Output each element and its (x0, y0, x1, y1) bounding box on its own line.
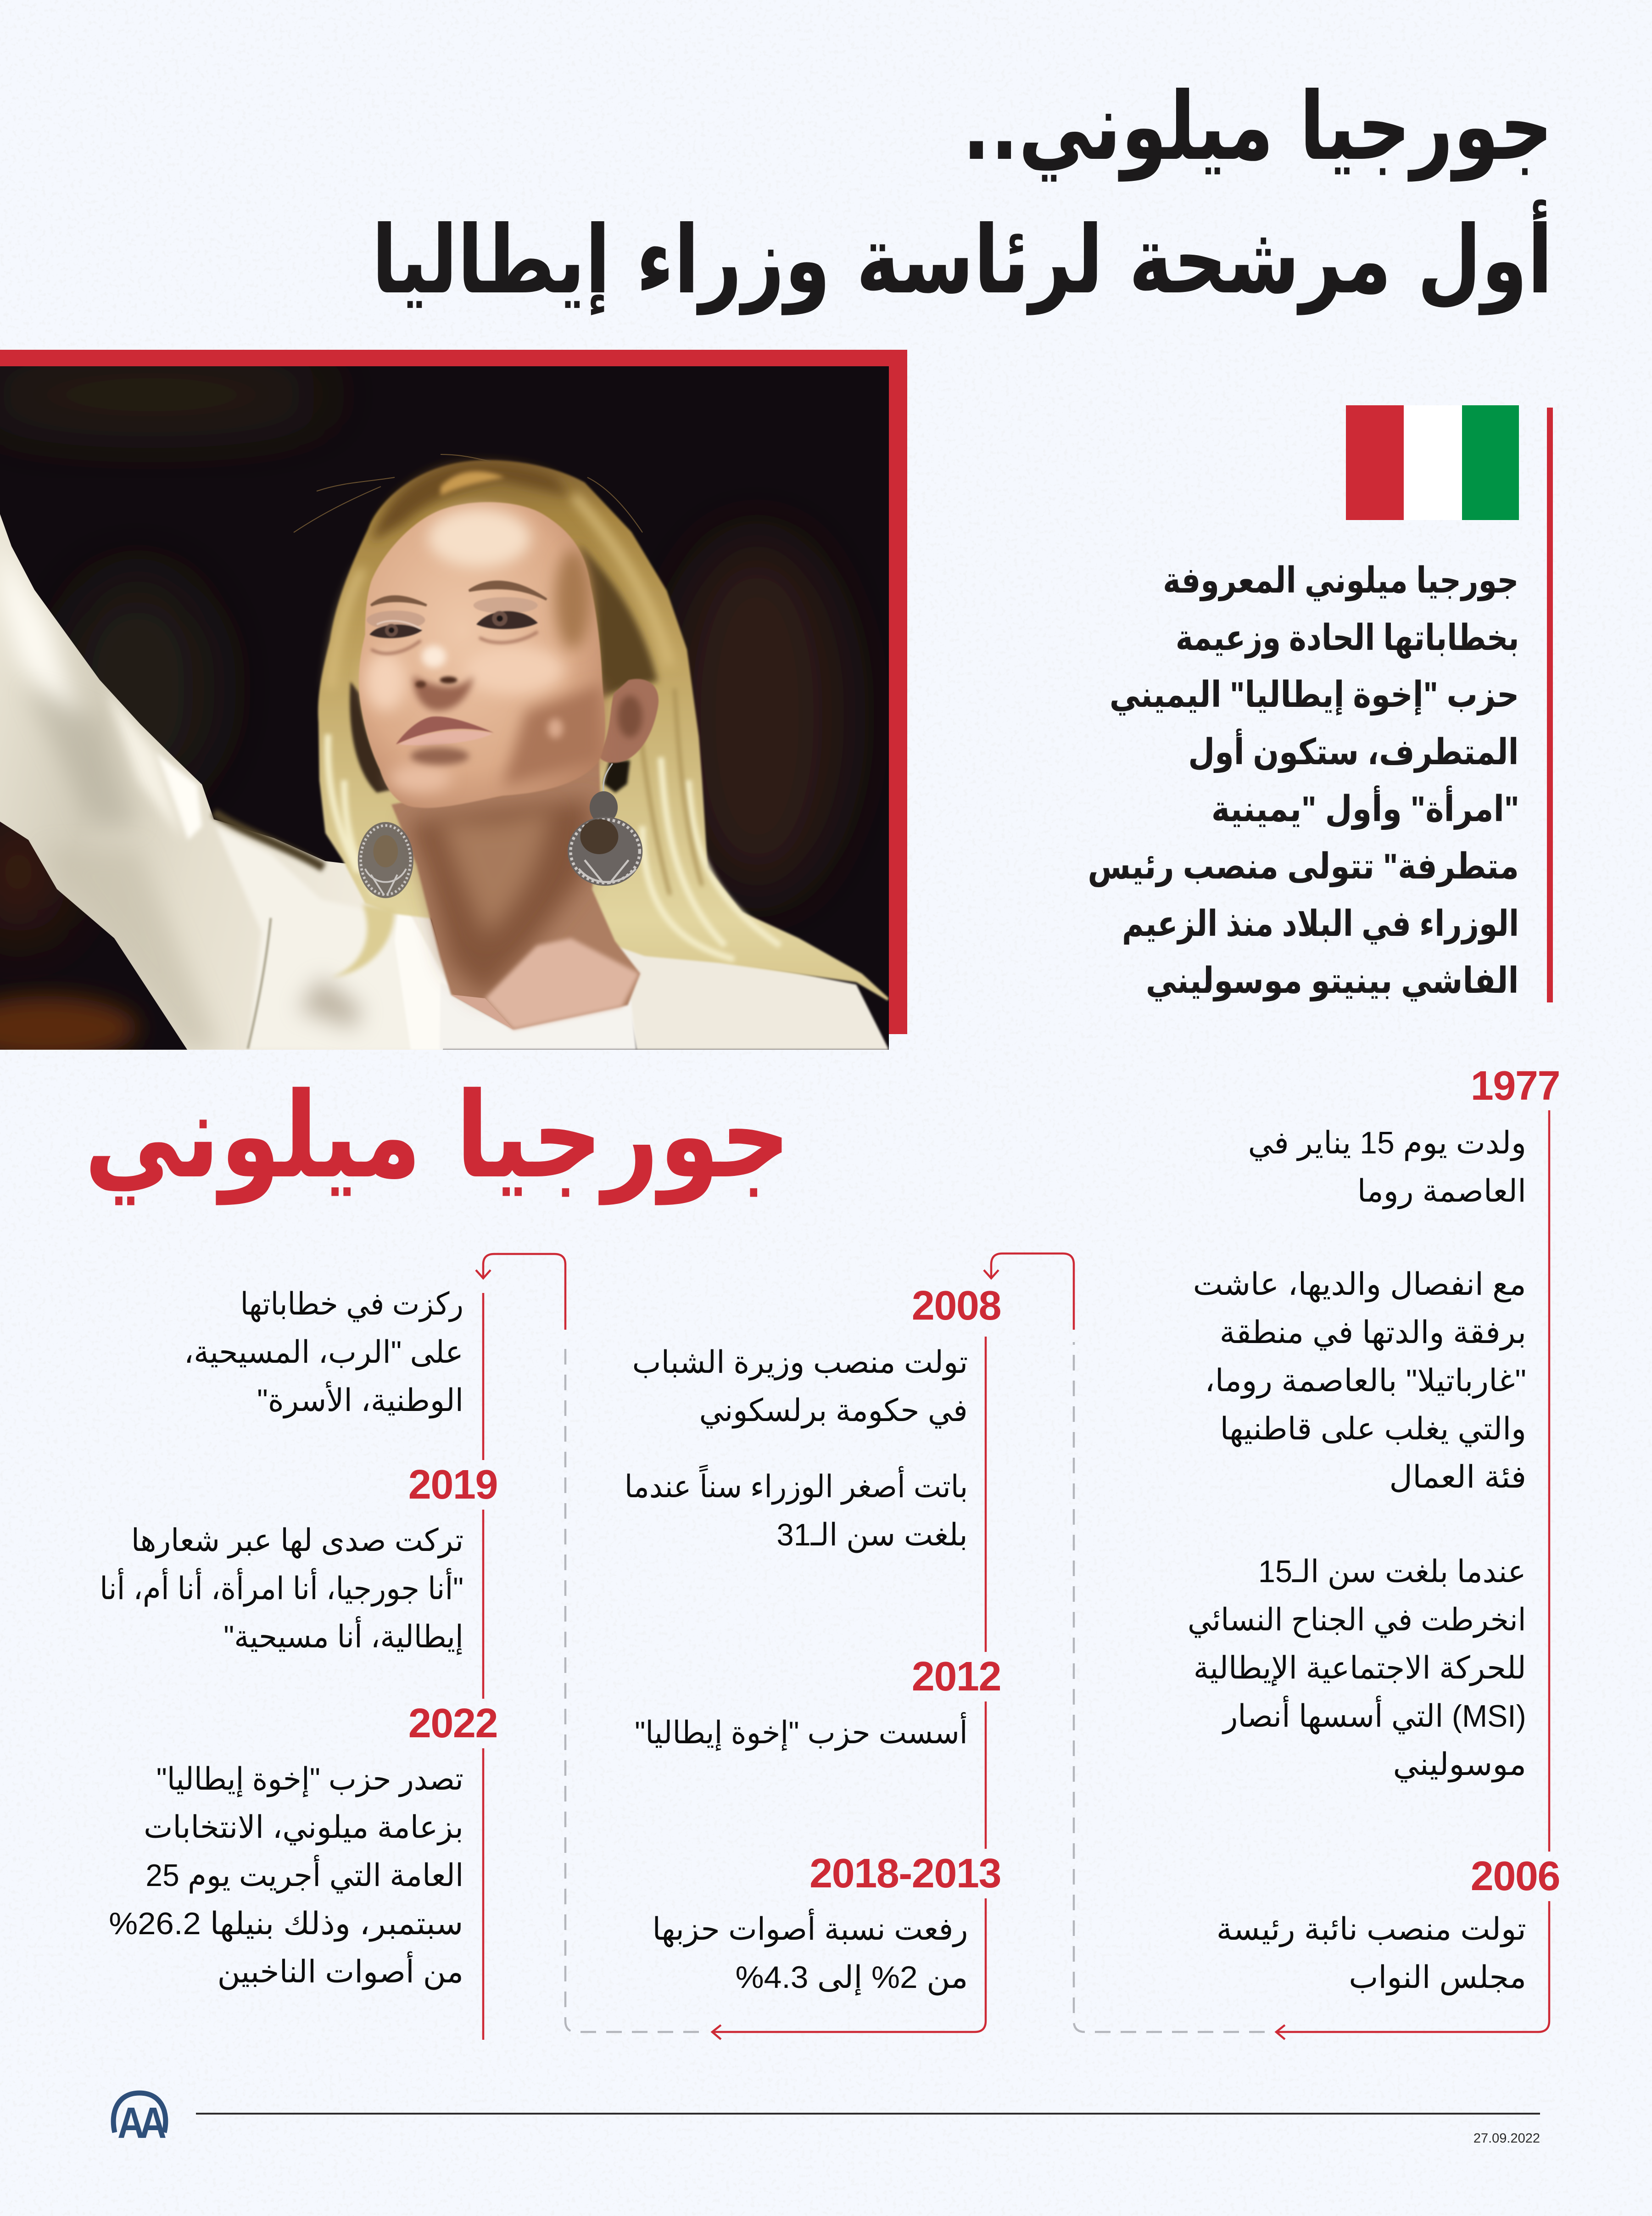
white shirt (440, 982, 636, 1050)
text: vote share: من 2% إلى 4.3% (735, 1960, 968, 1995)
intro text: حزب "إخوة إيطاليا" اليميني (1109, 674, 1519, 715)
intro text: متطرفة" تتولى منصب رئيس (1088, 846, 1519, 886)
footer rule (196, 2113, 1540, 2115)
eyes and brows (367, 582, 547, 638)
text: parents separation: برفقة والدتها في منطقة (1220, 1315, 1526, 1350)
text: youngest minister: بلغت سن الـ31 (777, 1517, 968, 1552)
text: joined MSI: انخرطت في الجناح النسائي (1188, 1602, 1526, 1637)
text: vote share (645, 1905, 968, 2002)
left earring (358, 822, 413, 898)
year 2022: 2022 (408, 1701, 497, 1746)
text: speeches (175, 1280, 463, 1425)
left hair wisp over jacket (330, 904, 395, 978)
text: joined MSI: (MSI) التي أسسها أنصار (1223, 1699, 1526, 1734)
text: parents separation (1197, 1260, 1526, 1501)
text: 2022 election: تصدر حزب "إخوة إيطاليا" (156, 1762, 463, 1796)
text: slogan (78, 1517, 463, 1661)
text: parents separation: فئة العمال (1389, 1460, 1526, 1494)
text: birth: العاصمة روما (1357, 1174, 1526, 1209)
text: speeches: ركزت في خطاباتها (240, 1287, 463, 1321)
year 2019: 2019 (408, 1462, 497, 1508)
connector: column two (712, 1337, 986, 2039)
text: youth minister: تولت منصب وزيرة الشباب (632, 1345, 968, 1380)
text: speeches: على "الرب، المسيحية، (184, 1335, 463, 1370)
year 2008: 2008 (912, 1283, 1001, 1329)
intro text: الفاشي بينيتو موسوليني (1146, 960, 1519, 1001)
text: slogan: تركت صدى لها عبر شعارها (131, 1523, 463, 1558)
arrow into column three (476, 1254, 565, 1330)
text: parents separation: "غارباتيلا" بالعاصمة روما، (1205, 1363, 1526, 1398)
text: youngest minister (605, 1463, 968, 1559)
mouth (396, 716, 494, 765)
text: 2022 election (123, 1755, 463, 1996)
intro text: الوزراء في البلاد منذ الزعيم (1122, 903, 1519, 944)
photo frame (0, 350, 907, 1034)
text: deputy speaker: مجلس النواب (1349, 1960, 1526, 1995)
white jacket and raised arm (0, 505, 459, 1051)
text: 2022 election: من أصوات الناخبين (218, 1954, 463, 1989)
year range 2018-2013: 2018-2013 (809, 1851, 1001, 1897)
intro text (1024, 552, 1519, 1009)
Italian flag (1346, 405, 1519, 520)
text: deputy speaker (1221, 1905, 1526, 2002)
intro side rule (1547, 408, 1553, 1002)
text: birth (1248, 1119, 1526, 1215)
hair (214, 454, 889, 1001)
connector: column one (1276, 1110, 1549, 2039)
year 2012: 2012 (912, 1654, 1001, 1700)
big name heading: جورجيا ميلوني (84, 1067, 791, 1204)
text: birth: ولدت يوم 15 يناير في (1248, 1125, 1526, 1160)
title: جورجيا ميلوني.. (962, 73, 1553, 181)
text: slogan: إيطالية، أنا مسيحية" (224, 1619, 463, 1654)
year 1977: 1977 (1471, 1063, 1560, 1109)
year 2006: 2006 (1471, 1853, 1560, 1899)
text: deputy speaker: تولت منصب نائبة رئيسة (1217, 1912, 1526, 1947)
arrow into column two (984, 1253, 1074, 1330)
dashed link from column two to column three (565, 1342, 699, 2032)
intro text: بخطاباتها الحادة وزعيمة (1175, 617, 1519, 658)
text: 2022 election: بزعامة ميلوني، الانتخابات (144, 1810, 463, 1845)
nose (413, 645, 474, 711)
right jacket panel (592, 936, 889, 1050)
text: speeches: الوطنية، الأسرة" (257, 1383, 463, 1418)
intro text: المتطرف، ستكون أول (1189, 732, 1519, 772)
text: joined MSI: موسوليني (1393, 1747, 1526, 1782)
intro text: "امرأة" وأول "يمينية (1211, 789, 1519, 829)
text: parents separation: والتي يغلب على قاطنيها (1220, 1411, 1526, 1446)
portrait photo of Giorgia Meloni (0, 366, 889, 1050)
title (58, 60, 1553, 327)
intro text: جورجيا ميلوني المعروفة (1163, 560, 1519, 600)
text: slogan: "أنا جورجيا، أنا امرأة، أنا أم، أنا (100, 1571, 463, 1606)
text: founded party: أسست حزب "إخوة إيطاليا" (635, 1715, 968, 1750)
text: joined MSI (1172, 1548, 1526, 1789)
date: 27.09.2022 (1473, 2131, 1540, 2146)
face (350, 502, 659, 808)
temple hair shadow (579, 544, 658, 699)
text: joined MSI: عندما بلغت سن الـ15 (1258, 1554, 1526, 1589)
dashed link from column one to column two (1074, 1342, 1265, 2032)
text: 2022 election: سبتمبر، وذلك بنيلها 26.2% (109, 1906, 463, 1941)
text: vote share: رفعت نسبة أصوات حزبها (652, 1912, 968, 1947)
text: parents separation: مع انفصال والديها، عاشت (1193, 1267, 1526, 1302)
text: 2022 election: العامة التي أجريت يوم 25 (145, 1858, 463, 1893)
right earring (568, 763, 642, 886)
dark stage background (0, 363, 889, 1060)
text: youth minister: في حكومة برلسكوني (699, 1393, 968, 1428)
connector: column three (482, 1293, 484, 2040)
AA logo (110, 2089, 170, 2141)
neck and chest (391, 761, 640, 1030)
title: أول مرشحة لرئاسة وزراء إيطاليا (372, 206, 1553, 315)
text: youth minister (626, 1338, 968, 1435)
text: youngest minister: باتت أصغر الوزراء سناً عندما (624, 1469, 968, 1504)
ear (598, 679, 659, 763)
text: joined MSI: للحركة الاجتماعية الإيطالية (1194, 1651, 1526, 1685)
